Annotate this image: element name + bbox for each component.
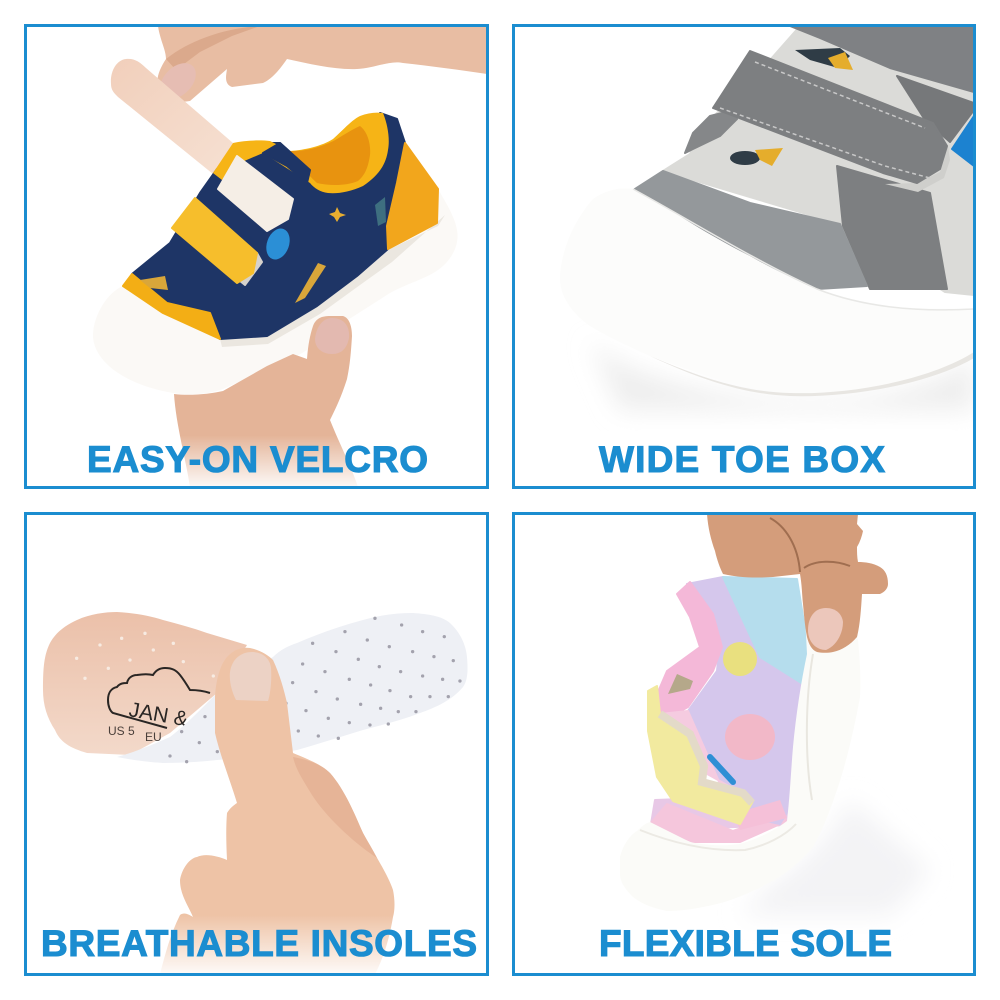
insole logo: US 5 [108, 724, 135, 738]
panel border 3 [26, 514, 488, 974]
insole logo [108, 668, 210, 744]
photo: grey shoe [606, 27, 973, 410]
panel border 4 [514, 514, 974, 974]
panel: wide toe box [606, 27, 973, 410]
heading: easy-on velcro: EASY-ON VELCRO [87, 439, 428, 480]
panel: flexible sole [640, 515, 915, 910]
photo: hand holding shoe [707, 514, 888, 653]
heading: flexible sole: FLEXIBLE SOLE [599, 923, 892, 964]
perforation holes [75, 617, 462, 763]
heading: breathable insoles: BREATHABLE INSOLES [41, 923, 477, 964]
photo: bottom hand [170, 316, 370, 487]
photo: velcro tab [111, 59, 233, 174]
photo: insole [43, 612, 468, 763]
panel border 1 [26, 26, 488, 488]
insole logo: EU [145, 730, 162, 744]
photo: top hand holding velcro strap [153, 26, 487, 106]
photo: navy shoe with yellow trim [93, 113, 458, 394]
panel border 2 [514, 26, 974, 488]
insole logo: JAN & [127, 698, 190, 731]
photo: lavender shoe [640, 576, 915, 910]
photo: hand pinching insole [150, 648, 400, 974]
panel: breathable insoles [43, 612, 468, 974]
panel: easy-on velcro [93, 26, 487, 487]
heading: wide toe box: WIDE TOE BOX [599, 439, 885, 480]
